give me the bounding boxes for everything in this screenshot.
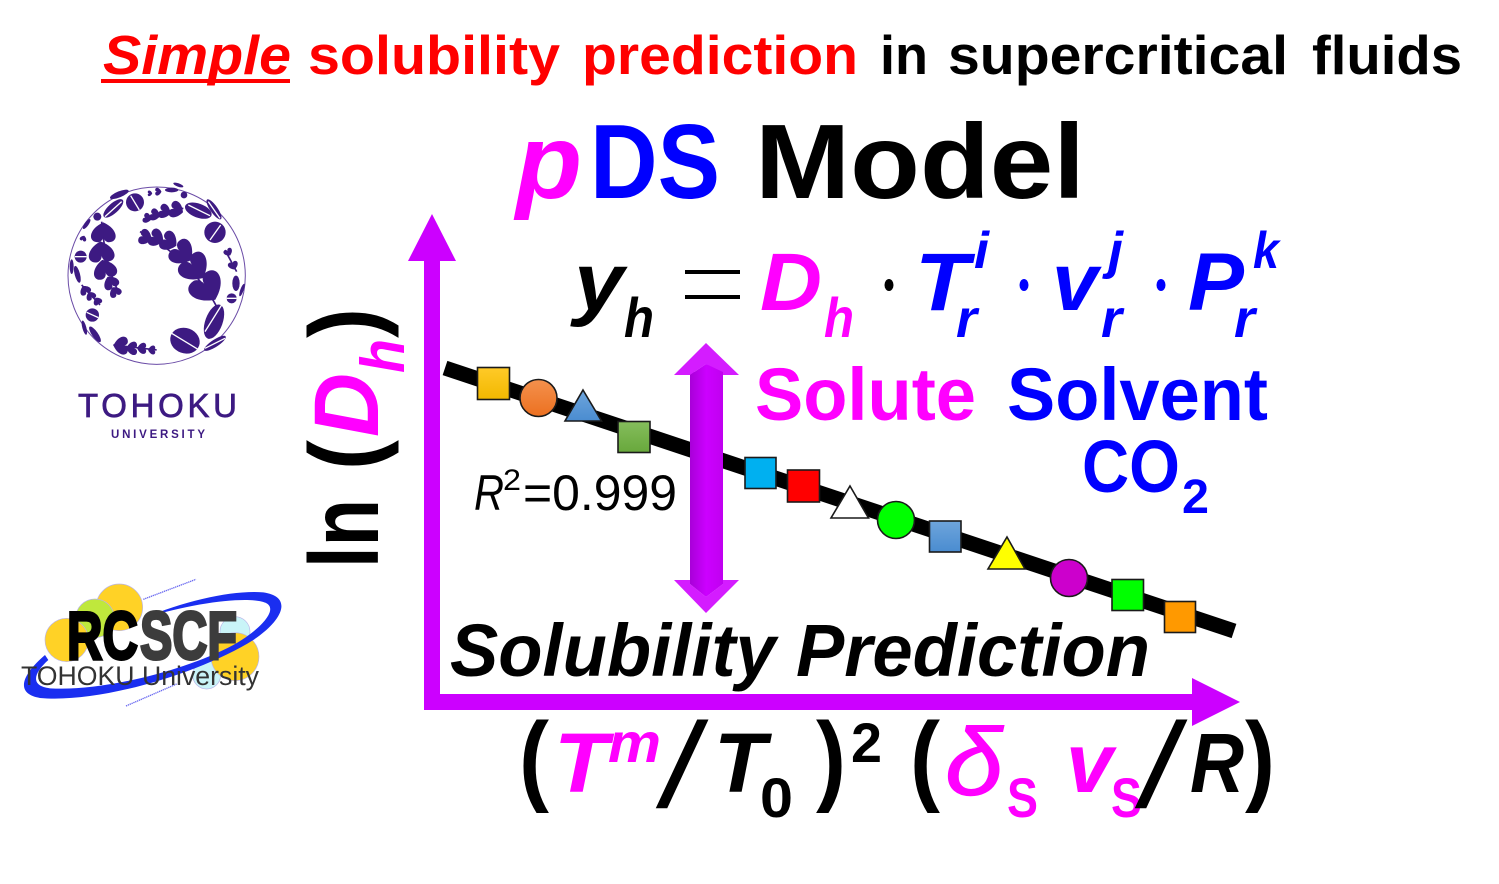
x axis label: v bbox=[1066, 716, 1117, 810]
logo: RCSCF Tohoku University bbox=[21, 579, 281, 706]
x axis label: S bbox=[1111, 766, 1142, 829]
heading: pDS Model: DS bbox=[590, 103, 720, 221]
x axis label: δ bbox=[945, 709, 1005, 816]
x axis label: ) bbox=[1245, 702, 1275, 814]
x axis label: / bbox=[657, 700, 707, 832]
double-headed arrow bbox=[674, 343, 739, 613]
label: Solvent CO2: Solvent bbox=[1007, 353, 1268, 436]
x axis label: / bbox=[1136, 700, 1186, 832]
x axis label: ( bbox=[519, 702, 550, 814]
x axis label: 2 bbox=[851, 711, 882, 774]
equation: r bbox=[1234, 289, 1258, 349]
equation: k bbox=[1253, 222, 1282, 280]
label: Solvent CO2 bbox=[1007, 353, 1268, 524]
equation: v bbox=[1052, 237, 1102, 328]
y axis label: D bbox=[296, 373, 398, 437]
logo: RCSCF Tohoku University: RC bbox=[67, 598, 138, 674]
logo: RCSCF Tohoku University: SCF bbox=[140, 598, 237, 674]
title: solubility bbox=[308, 24, 560, 86]
title: fluids bbox=[1312, 24, 1462, 86]
x axis arrow bbox=[424, 678, 1240, 726]
y axis label bbox=[289, 308, 418, 568]
label: Solubility Prediction: Solubility Prediction bbox=[450, 609, 1150, 692]
x axis label: ( bbox=[910, 702, 941, 814]
logo: RCSCF Tohoku University: TOHOKU University bbox=[21, 661, 259, 691]
equation: y bbox=[570, 237, 629, 328]
label: Solvent CO2: 2 bbox=[1182, 471, 1209, 524]
heading: pDS Model: p bbox=[513, 103, 582, 221]
equation: P bbox=[1188, 237, 1244, 328]
logo: Tohoku University bbox=[68, 182, 246, 441]
equation bbox=[570, 222, 1282, 349]
title: in bbox=[880, 24, 928, 86]
x axis label: ) bbox=[816, 702, 846, 814]
equation: i bbox=[974, 222, 991, 280]
x axis label: S bbox=[1007, 766, 1038, 829]
y axis label: ) bbox=[289, 308, 399, 338]
heading: pDS Model bbox=[513, 103, 1085, 221]
R-squared value: 2 bbox=[503, 464, 521, 497]
title: prediction bbox=[582, 24, 858, 86]
label: Solvent CO2: CO bbox=[1082, 425, 1180, 508]
logo: Tohoku University: TOHOKU bbox=[78, 387, 237, 424]
y axis label: ln bbox=[289, 499, 399, 568]
x axis label: T bbox=[714, 716, 773, 810]
label: Solute: Solute bbox=[755, 353, 976, 436]
equation: j bbox=[1102, 222, 1125, 280]
title: supercritical bbox=[948, 24, 1288, 86]
heading: pDS Model: Model bbox=[755, 103, 1085, 221]
equation: r bbox=[1101, 289, 1125, 349]
logo: Tohoku University: UNIVERSITY bbox=[111, 429, 205, 441]
x axis label: T bbox=[554, 716, 615, 810]
title: Simple bbox=[103, 24, 291, 86]
y axis arrow bbox=[408, 214, 456, 710]
x axis label: R bbox=[1190, 716, 1244, 810]
R-squared value: R bbox=[474, 465, 504, 521]
y axis label: ( bbox=[289, 440, 399, 470]
equation: D bbox=[760, 237, 822, 328]
R-squared value: =0.999 bbox=[523, 465, 677, 521]
x axis label: m bbox=[608, 711, 661, 774]
y axis label: h bbox=[349, 339, 418, 373]
equation: r bbox=[956, 289, 980, 349]
data markers bbox=[478, 368, 1196, 632]
equation: h bbox=[824, 286, 854, 349]
x axis label: 0 bbox=[760, 766, 793, 829]
x axis label bbox=[519, 700, 1275, 832]
equation: h bbox=[624, 286, 654, 349]
title bbox=[101, 24, 1462, 86]
fit line bbox=[445, 368, 1234, 631]
equation: T bbox=[915, 237, 975, 328]
